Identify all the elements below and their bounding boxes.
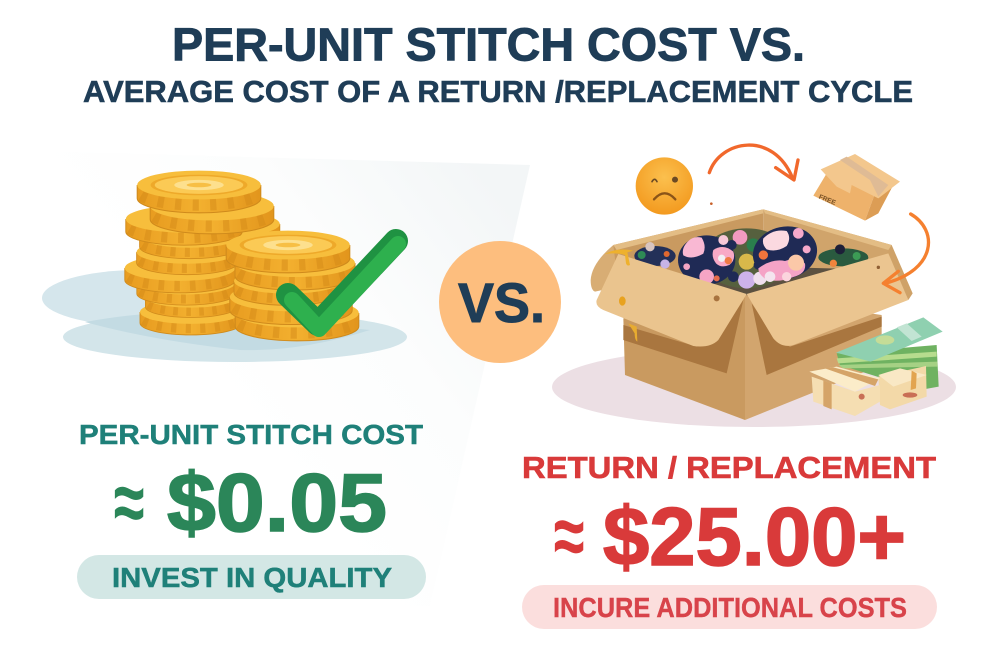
value: $0.05: $0.05 (167, 456, 387, 549)
pill: invest in quality (77, 555, 426, 599)
icon: green check mark (288, 241, 398, 329)
vs badge (439, 241, 561, 363)
icon: damaged parcel (813, 154, 900, 221)
title: AVERAGE COST OF A RETURN /REPLACEMENT CYCLE (83, 74, 913, 109)
arrow: top curved (709, 145, 798, 180)
label: return / replacement: RETURN / REPLACEMENT (522, 450, 936, 485)
icon: sad face (636, 157, 693, 215)
value: $25.00+: $25.00+ (603, 490, 906, 583)
title: PER-UNIT STITCH COST VS. (172, 18, 805, 70)
icon: damaged parcel: FREE (818, 194, 837, 207)
icon: left coin stack (125, 171, 280, 335)
approx symbol: ≈ (554, 489, 584, 583)
vs badge: VS. (458, 271, 545, 334)
arrow: right curved (883, 214, 928, 293)
illustration: return box scene (591, 145, 943, 420)
pill: invest in quality: INVEST IN QUALITY (112, 562, 392, 593)
icon: open cardboard box (591, 202, 913, 420)
illustration: coin stacks with check mark (42, 171, 407, 362)
label: per-unit stitch cost: PER-UNIT STITCH COST (79, 419, 423, 450)
title (83, 18, 913, 109)
pill: incure additional costs (522, 585, 937, 629)
icon: small cream boxes (809, 366, 927, 416)
icon: right coin stack (226, 231, 359, 341)
panel: return / replacement (522, 145, 956, 629)
clothes: floral fabric (634, 221, 868, 289)
icon: cash stack (836, 317, 943, 390)
approx symbol: ≈ (114, 456, 144, 550)
panel: per-unit stitch cost (0, 150, 530, 606)
pill: incure additional costs: INCURE ADDITIONAL COSTS (553, 592, 907, 623)
